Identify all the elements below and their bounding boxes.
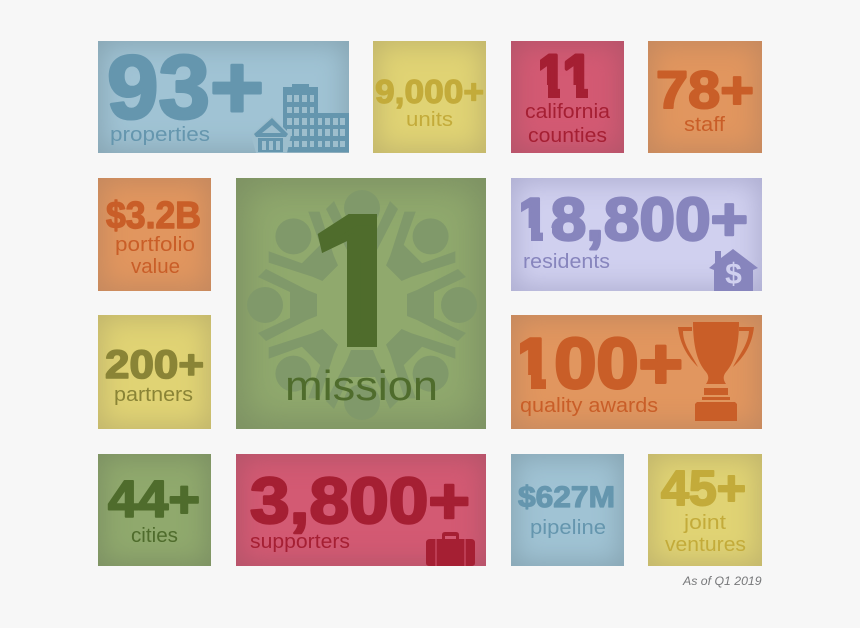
label: residents: residents — [523, 251, 610, 273]
tile: 78+ staff — [648, 41, 762, 153]
number: 45+: 45+ — [661, 462, 746, 516]
tile: $627M pipeline — [511, 454, 624, 566]
number: 100+: 100+ — [512, 325, 683, 404]
number: 200+: 200+ — [105, 343, 204, 387]
icon: house with dollar — [709, 249, 758, 291]
icon: house with dollar: $ — [725, 258, 742, 291]
label: quality awards: quality awards — [520, 395, 658, 417]
label: pipeline: pipeline — [530, 517, 606, 539]
tile: 93+ properties — [98, 41, 349, 153]
label: california: california — [525, 101, 611, 123]
icon: ring of people — [247, 190, 477, 420]
footnote: as of date: As of Q1 2019 — [683, 574, 762, 588]
tile: 45+ joint ventures — [648, 454, 762, 566]
number: 44+: 44+ — [108, 471, 200, 529]
label: partners: partners — [114, 384, 193, 406]
label: cities: cities — [131, 525, 178, 547]
label: ventures: ventures — [665, 534, 746, 556]
number: 18,800+: 18,800+ — [515, 186, 748, 253]
label: value: value — [131, 256, 180, 278]
number: 1: 1 — [309, 178, 415, 390]
tile: 11 california counties — [511, 41, 624, 153]
label: joint: joint — [683, 512, 726, 534]
number: $3.2B: $3.2B — [106, 195, 201, 237]
tile: 100+ quality awards — [511, 315, 762, 429]
icon: trophy — [678, 322, 754, 421]
label: portfolio: portfolio — [115, 234, 195, 256]
number: 3,800+: 3,800+ — [250, 464, 470, 537]
label: supporters: supporters — [250, 531, 350, 553]
icon: briefcase — [426, 532, 475, 566]
tile: 1 mission — [236, 178, 486, 429]
label: mission: mission — [285, 362, 438, 409]
label: units: units — [406, 109, 453, 131]
tile: 200+ partners — [98, 315, 211, 429]
number: 9,000+: 9,000+ — [375, 73, 484, 110]
number: 11: 11 — [536, 43, 592, 110]
icon: buildings — [251, 84, 349, 153]
tile: $3.2B portfolio value — [98, 178, 211, 291]
tile: 3,800+ supporters — [236, 454, 486, 566]
label: counties: counties — [528, 125, 607, 147]
label: properties: properties — [110, 124, 210, 146]
number: $627M: $627M — [518, 481, 615, 514]
tile: 18,800+ residents — [511, 178, 762, 291]
tile: 44+ cities — [98, 454, 211, 566]
number: 78+: 78+ — [656, 61, 754, 120]
tile: 9,000+ units — [373, 41, 486, 153]
label: staff: staff — [684, 114, 725, 136]
